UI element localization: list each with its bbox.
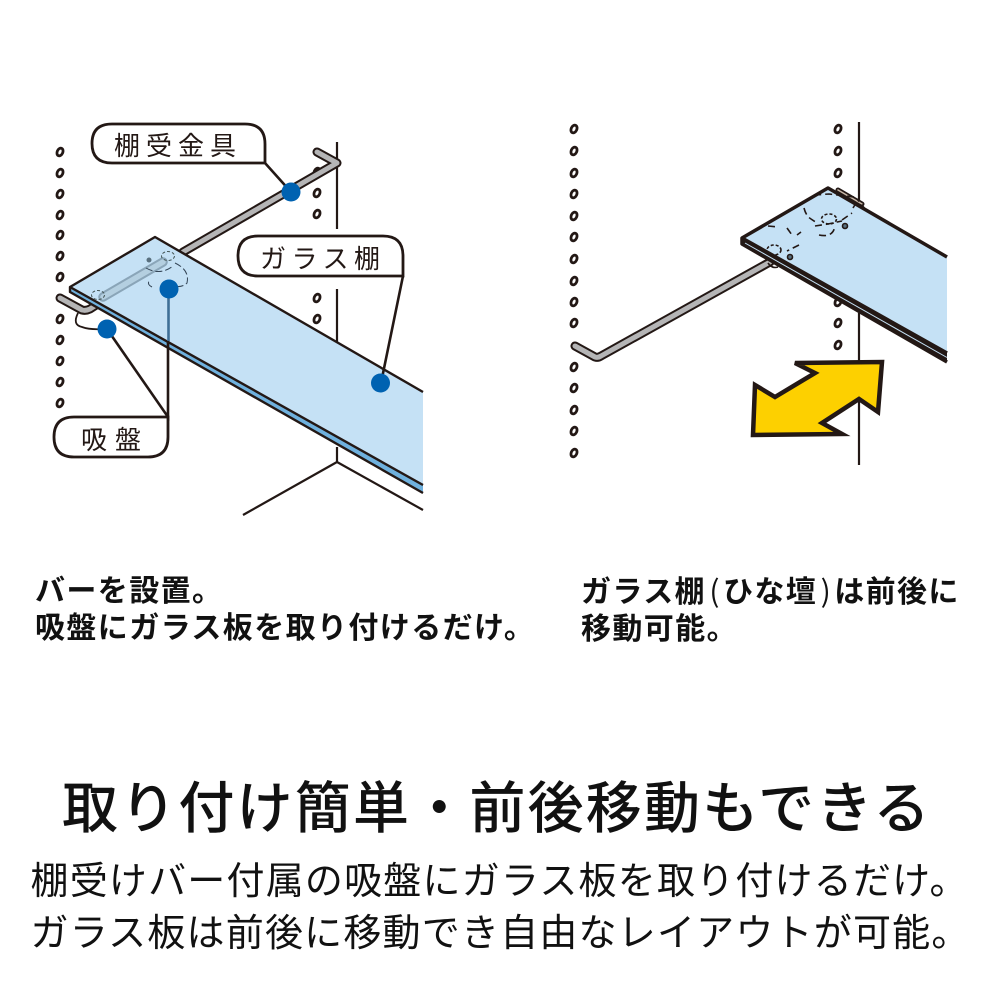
callout: 吸盤 (54, 417, 168, 457)
body text: ガラス板は前後に移動でき自由なレイアウトが可能。 (30, 913, 971, 955)
caption: left (35, 575, 535, 645)
lower suction cup outline (76, 313, 104, 329)
glass shelf (742, 188, 947, 362)
title: 取り付け簡単・前後移動もできる (62, 777, 932, 840)
caption: left: バーを設置。 (35, 575, 223, 608)
right illustration (570, 122, 947, 465)
callout: 棚受金具: 棚受金具 (114, 131, 242, 161)
bar seen through glass (92, 252, 188, 300)
shelf bracket bar (60, 152, 337, 310)
callout: 棚受金具 (92, 124, 265, 163)
callout: ガラス棚 (238, 236, 403, 276)
glass shelf (70, 237, 423, 493)
caption: right (581, 567, 960, 646)
body text (30, 861, 971, 955)
leader lines (107, 163, 403, 417)
caption: right: ガラス棚 ひな壇 は前後に (581, 576, 960, 609)
callout: 吸盤: 吸盤 (81, 425, 149, 455)
body text: 棚受けバー付属の吸盤にガラス板を取り付けるだけ。 (30, 861, 969, 903)
double-headed yellow arrow (753, 362, 882, 435)
wall line (858, 122, 860, 465)
caption: right: 移動可能。 (581, 613, 738, 646)
bracket bar (575, 190, 862, 357)
wall peg holes, right panel (570, 124, 842, 458)
caption: right: ( (709, 567, 720, 611)
callout: ガラス棚: ガラス棚 (260, 244, 385, 274)
wall corner lines (243, 142, 423, 515)
left illustration (54, 124, 423, 515)
blue marker dots (98, 182, 390, 392)
caption: right: ) (821, 567, 831, 611)
dashed suction cups (767, 194, 866, 268)
wall peg holes, left panel (56, 147, 321, 408)
caption: left: 吸盤にガラス板を取り付けるだけ。 (35, 612, 535, 645)
